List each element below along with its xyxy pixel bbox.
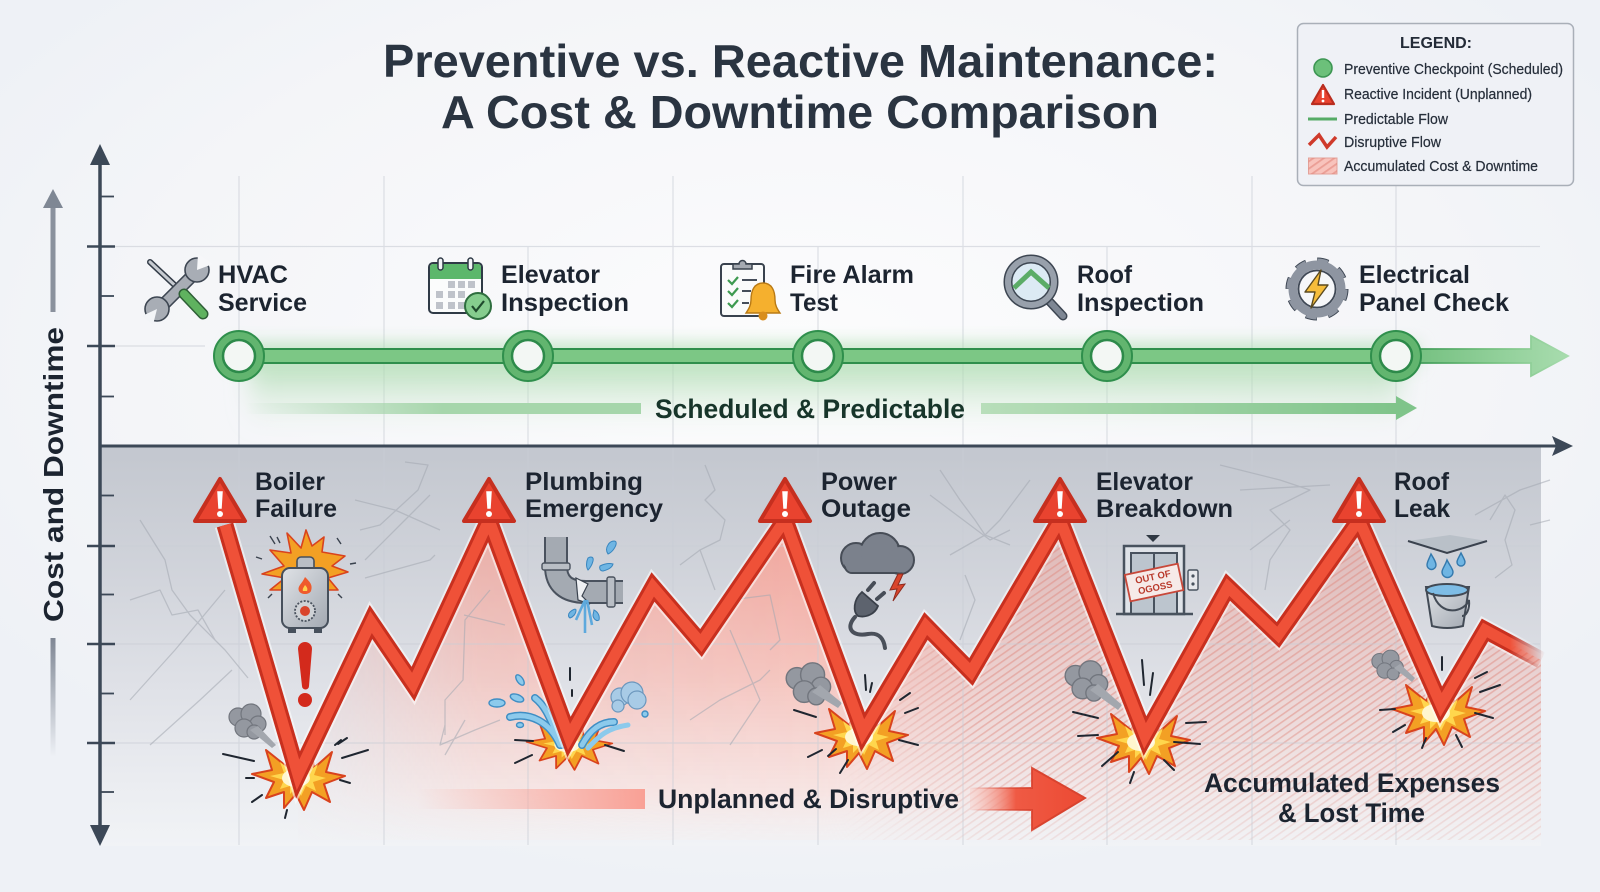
legend: reactive incident: Reactive Incident (Unplanned) bbox=[1344, 87, 1532, 103]
label: Roof Leak bbox=[1394, 468, 1450, 523]
checkpoint 5 bbox=[1371, 331, 1421, 381]
label: Electrical Panel Check bbox=[1359, 261, 1509, 317]
background wall cracks bbox=[130, 462, 1550, 755]
incident triangle 2 bbox=[464, 479, 514, 521]
timeline arrow bbox=[239, 336, 1568, 376]
label: Elevator Inspection: Inspection bbox=[501, 289, 629, 317]
smoke 1 bbox=[229, 704, 276, 748]
legend: predictable flow: Predictable Flow bbox=[1344, 112, 1449, 128]
y axis title with arrow bbox=[38, 189, 69, 757]
disruptive zigzag line bbox=[225, 520, 1541, 775]
unplanned label: Unplanned & Disruptive bbox=[658, 784, 959, 814]
icon: calendar with check bbox=[429, 258, 491, 319]
explosion 5 bbox=[1380, 657, 1500, 748]
label: Power Outage bbox=[821, 468, 911, 523]
label: Roof Inspection bbox=[1077, 261, 1204, 317]
label: Boiler Failure bbox=[255, 468, 337, 523]
icon: exploding boiler bbox=[256, 530, 356, 633]
accumulated expenses label bbox=[1204, 768, 1500, 828]
x axis bbox=[100, 436, 1573, 456]
label: Plumbing Emergency bbox=[525, 468, 663, 523]
label: Fire Alarm Test: Test bbox=[790, 289, 839, 317]
icon: out of order elevator: OUT OF bbox=[1134, 568, 1172, 587]
scheduled flow arrow right bbox=[981, 396, 1417, 420]
label: Roof Leak: Leak bbox=[1394, 495, 1450, 523]
label: Electrical Panel Check: Panel Check bbox=[1359, 289, 1509, 317]
accumulated expenses label: & Lost Time bbox=[1278, 798, 1425, 828]
label: Plumbing Emergency: Plumbing bbox=[525, 468, 643, 496]
panel: preventive timeline bbox=[142, 254, 1568, 426]
panel: reactive incidents bbox=[195, 468, 1541, 830]
label: Power Outage: Power bbox=[821, 468, 897, 496]
icon: out of order elevator bbox=[1116, 535, 1198, 614]
unplanned arrow bbox=[970, 768, 1085, 830]
label: Elevator Breakdown bbox=[1096, 468, 1233, 523]
legend: accumulated cost: Accumulated Cost & Downtime bbox=[1344, 159, 1538, 175]
legend bbox=[1298, 24, 1574, 186]
grid lines bbox=[115, 176, 1540, 845]
accumulated expenses label: Accumulated Expenses bbox=[1204, 768, 1500, 798]
title: Preventive vs. Reactive Maintenance: bbox=[383, 35, 1218, 87]
scheduled flow bar left bbox=[245, 403, 641, 414]
explosion 2 with water bbox=[489, 668, 648, 770]
label: Fire Alarm Test: Fire Alarm bbox=[790, 261, 914, 289]
label: Electrical Panel Check: Electrical bbox=[1359, 261, 1470, 289]
label: Elevator Inspection: Elevator bbox=[501, 261, 600, 289]
icon: clipboard with bell bbox=[721, 260, 780, 320]
incident triangle 3 bbox=[760, 479, 810, 521]
label: Roof Inspection: Inspection bbox=[1077, 289, 1204, 317]
label: Plumbing Emergency: Emergency bbox=[525, 495, 663, 523]
y axis bbox=[87, 144, 115, 846]
label: Boiler Failure: Failure bbox=[255, 495, 337, 523]
label: Roof Inspection: Roof bbox=[1077, 261, 1133, 289]
panel: reactive zone background bbox=[100, 446, 1541, 846]
label: Elevator Inspection bbox=[501, 261, 629, 317]
label: Roof Leak: Roof bbox=[1394, 468, 1450, 496]
smoke 4 bbox=[1065, 661, 1122, 710]
explosion 1 bbox=[223, 738, 368, 818]
checkpoint 2 bbox=[503, 331, 553, 381]
label: Elevator Breakdown: Elevator bbox=[1096, 468, 1193, 496]
icon: magnifier over roof bbox=[1008, 259, 1063, 316]
incident triangle 4 bbox=[1035, 479, 1085, 521]
scheduled label: Scheduled & Predictable bbox=[655, 394, 965, 424]
icon: wrench and screwdriver bbox=[142, 254, 213, 325]
incident triangle 5 bbox=[1334, 479, 1384, 521]
icon: burst pipe bbox=[542, 537, 623, 633]
label: Fire Alarm Test bbox=[790, 261, 914, 317]
explosion 4 bbox=[1073, 660, 1206, 783]
title bbox=[383, 35, 1218, 138]
icon: red exclamation bbox=[298, 642, 312, 707]
label: HVAC Service: HVAC bbox=[218, 261, 288, 289]
label: Boiler Failure: Boiler bbox=[255, 468, 325, 496]
accumulated cost area bbox=[298, 527, 1541, 840]
icon: gear with lightning bbox=[1290, 262, 1344, 316]
incident triangle 1 bbox=[195, 479, 245, 521]
title: A Cost & Downtime Comparison bbox=[441, 86, 1159, 138]
smoke 3 bbox=[786, 663, 842, 708]
legend title: LEGEND: bbox=[1400, 35, 1472, 52]
checkpoint 1 bbox=[214, 331, 264, 381]
legend: preventive checkpoint: Preventive Checkpoint (Scheduled) bbox=[1344, 62, 1563, 78]
label: HVAC Service bbox=[218, 261, 307, 317]
icon: roof leak with bucket bbox=[1408, 535, 1487, 628]
label: HVAC Service: Service bbox=[218, 289, 307, 317]
legend: disruptive flow: Disruptive Flow bbox=[1344, 135, 1442, 151]
explosion 3 bbox=[794, 675, 918, 773]
icon: storm cloud with plug bbox=[841, 533, 914, 648]
unplanned fade bar bbox=[417, 789, 645, 809]
checkpoint 3 bbox=[793, 331, 843, 381]
smoke 5 bbox=[1372, 650, 1415, 682]
checkpoint 4 bbox=[1082, 331, 1132, 381]
icon: out of order elevator: OGOSS bbox=[1137, 579, 1174, 597]
label: Power Outage: Outage bbox=[821, 495, 911, 523]
green glow under timeline bbox=[230, 342, 1420, 426]
y axis title with arrow: Cost and Downtime bbox=[38, 327, 69, 622]
label: Elevator Breakdown: Breakdown bbox=[1096, 495, 1233, 523]
